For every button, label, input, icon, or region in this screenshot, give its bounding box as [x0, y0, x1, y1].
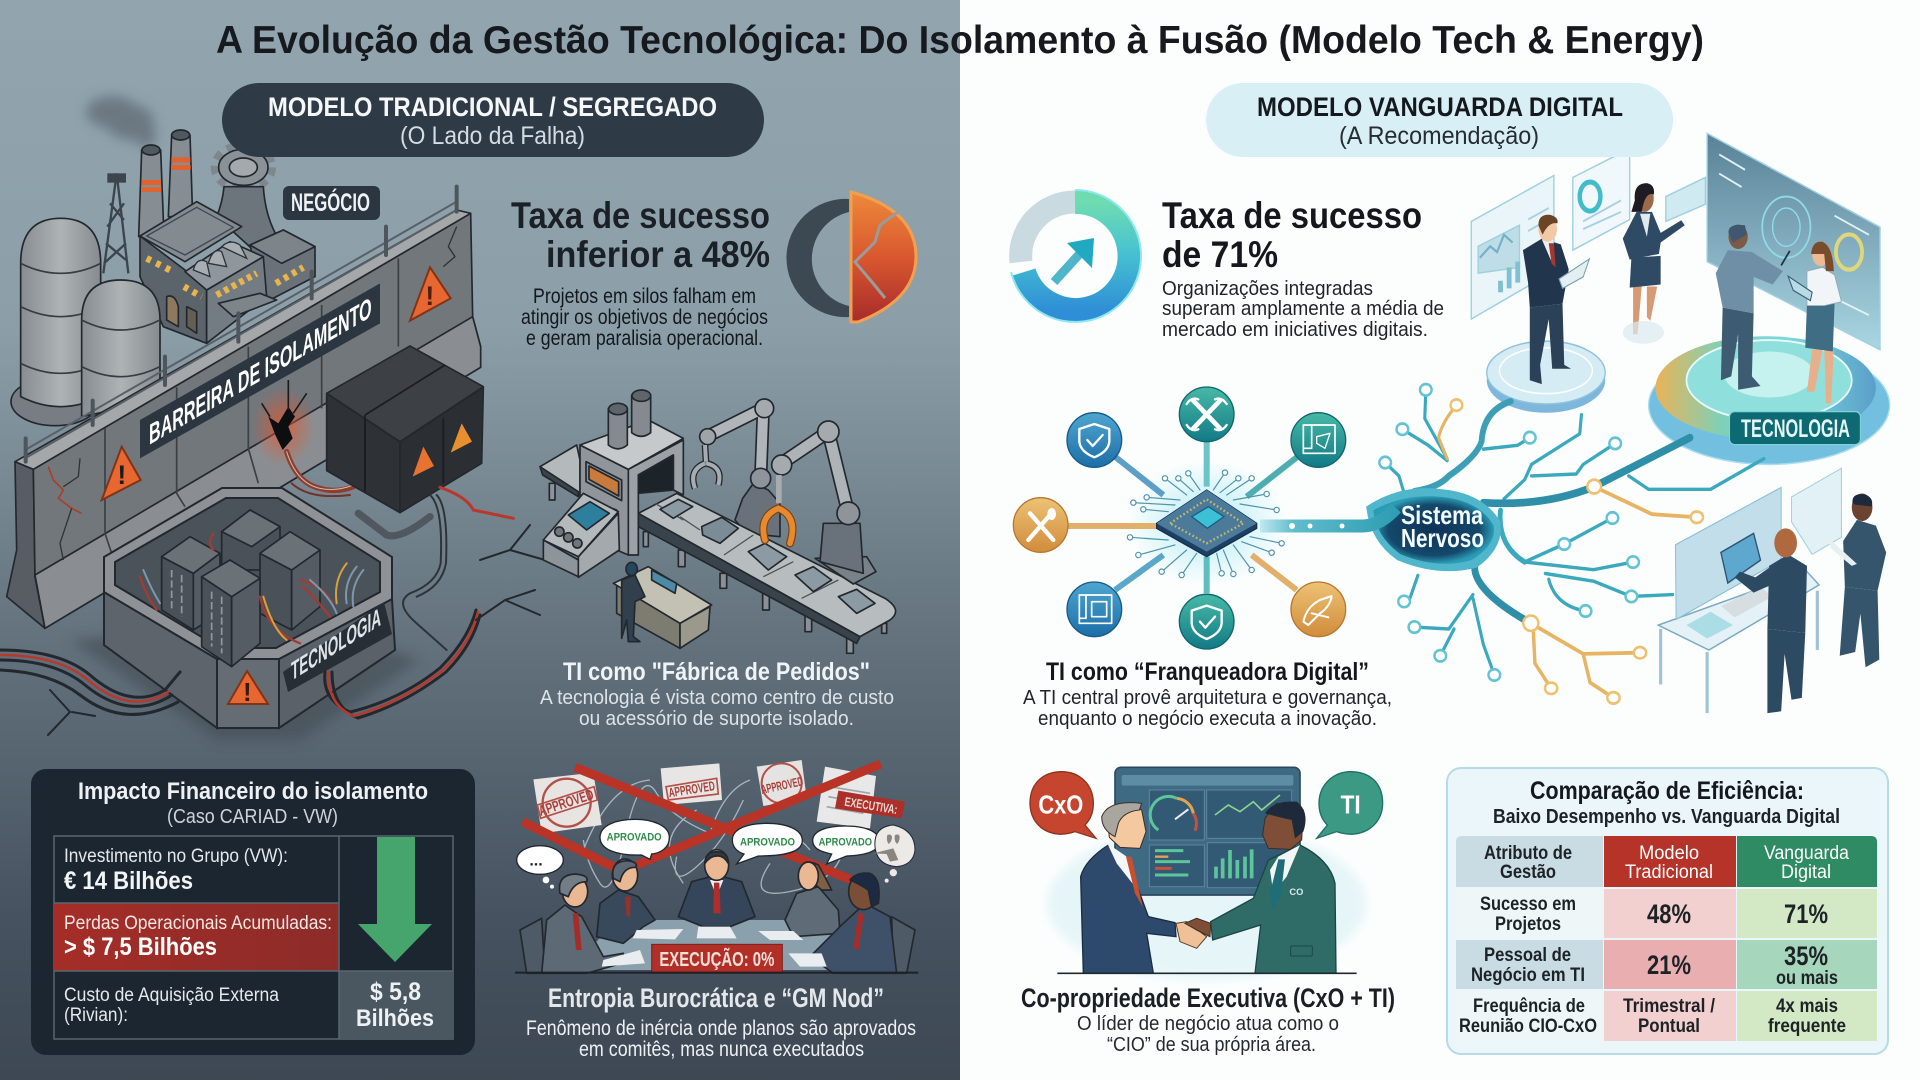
connectors: [1067, 440, 1297, 593]
panel: financial impact: [31, 769, 475, 1055]
caption: bureaucratic entropy: [526, 983, 916, 1061]
financial table: (Rivian):: [64, 1005, 128, 1026]
technology bunker: [70, 488, 420, 740]
bubble: TI: [1317, 772, 1383, 838]
comparison table: Projetos: [1495, 914, 1561, 935]
financial table: $ 5,8: [370, 978, 421, 1006]
speech bubbles: APROVADO: [819, 836, 872, 848]
financial table: Bilhões: [356, 1005, 434, 1032]
caption: digital franchise: [1023, 658, 1392, 730]
control panel: [543, 493, 619, 577]
warning sign: !: [117, 460, 126, 490]
financial table: € 14 Bilhões: [64, 867, 193, 895]
icon: teal blueprint: [1291, 413, 1346, 467]
illustration: central chip franchise hub: [1013, 387, 1346, 649]
icon: microchip: [1157, 490, 1257, 557]
heading: Impacto Financeiro do isolamento: [78, 778, 428, 805]
panel: digital side background: [960, 0, 1920, 1080]
icon: teal wrench: [1179, 387, 1234, 442]
person: woman with tablet: [1788, 242, 1841, 403]
badge: Negócio: NEGÓCIO: [291, 187, 370, 217]
stat: 71% success: Organizações integradas: [1162, 277, 1373, 300]
illustration: order factory conveyor: [540, 390, 896, 653]
caption: order factory: TI como "Fábrica de Pedidos": [563, 658, 870, 686]
caption: digital franchise: A TI central provê arquitetura e governança,: [1023, 686, 1392, 709]
person: man with document: [1828, 494, 1886, 667]
stat: 71% success: Taxa de sucesso: [1162, 195, 1422, 236]
platform: people: [1487, 341, 1605, 413]
illustration: CxO and TI handshake: [1030, 767, 1383, 980]
tangled lines: [583, 780, 844, 893]
comparison table: Frequência de: [1473, 996, 1585, 1017]
comparison table: Reunião CIO-CxO: [1459, 1016, 1597, 1037]
comparison table: Modelo: [1639, 843, 1699, 864]
financial table: Investimento no Grupo (VW):: [64, 846, 288, 867]
warning sign: !: [243, 677, 252, 707]
bubble: TI: TI: [1341, 789, 1361, 819]
floating panels: [1471, 133, 1880, 350]
caption: order factory: ou acessório de suporte isolado.: [579, 707, 854, 730]
badge: Negócio: [283, 186, 380, 220]
comparison table: Gestão: [1500, 862, 1556, 883]
speech bubbles: [517, 819, 915, 889]
handshake: [1176, 918, 1211, 948]
caption: executive co-ownership: O líder de negócio atua como o: [1077, 1012, 1339, 1035]
header: digital vanguard model: MODELO VANGUARDA DIGITAL: [1257, 92, 1623, 122]
approved papers: APPROVED: [667, 778, 716, 800]
desk with workstation: [1658, 468, 1841, 713]
icon: teal shield: [1179, 594, 1234, 649]
comparison table: 4x mais: [1776, 996, 1838, 1017]
stat: 48% success: Projetos em silos falham em: [533, 285, 756, 308]
barrier wall: [7, 187, 481, 628]
stat: 71% success: superam amplamente a média de: [1162, 297, 1444, 320]
icon: blue shield: [1067, 413, 1122, 467]
nerve nodes: [1379, 384, 1703, 704]
comparison table: Vanguarda: [1764, 843, 1849, 864]
icon: smoke: [86, 96, 156, 148]
comparison table: Digital: [1781, 862, 1831, 883]
person: businessman with tablet: [1523, 215, 1589, 384]
panel: financial impact: (Caso CARIAD - VW): [167, 806, 338, 828]
comparison table: Atributo de: [1484, 843, 1572, 864]
approved papers: EXECUTIVA:: [844, 795, 898, 817]
dashboard screen: [1115, 767, 1300, 895]
nerve branches: [1385, 390, 1764, 698]
caption: order factory: [540, 658, 894, 730]
bubble: CxO: CxO: [1038, 789, 1083, 819]
header: digital vanguard model: (A Recomendação): [1339, 122, 1539, 150]
hub label: Sistema Nervoso: Sistema: [1401, 500, 1483, 530]
approved papers: [533, 760, 905, 833]
heading: Comparação de Eficiência:: [1530, 777, 1804, 805]
warning sign: !: [425, 281, 434, 311]
chip to hub connection: [1260, 508, 1396, 529]
label pill: Tecnologia: [1730, 412, 1860, 445]
hub label: Sistema Nervoso: Nervoso: [1401, 523, 1484, 553]
comparison table: Pessoal de: [1484, 945, 1571, 966]
caption: bureaucratic entropy: Entropia Burocrática e “GM Nod”: [548, 983, 884, 1013]
comparison table: Pontual: [1638, 1016, 1700, 1037]
header: digital vanguard model: [1206, 83, 1673, 157]
operator at desk: [613, 562, 712, 648]
label: Tecnologia: TECNOLOGIA: [291, 602, 381, 687]
header: traditional model: [222, 83, 764, 157]
cables from crack: [287, 452, 353, 496]
badge: execution 0%: EXECUÇÃO: 0%: [659, 948, 774, 971]
ground cables and cracks: [0, 525, 545, 735]
speech bubbles: APROVADO: [740, 836, 795, 848]
illustration: nervous system, platforms and digital team: [1366, 133, 1890, 713]
speech bubbles: ...: [529, 852, 543, 869]
header: traditional model: MODELO TRADICIONAL / SEGREGADO: [268, 92, 717, 122]
caption: order factory: A tecnologia é vista como centro de custo: [540, 686, 894, 709]
table papers: [602, 927, 827, 967]
conveyor belt: [638, 493, 896, 653]
back conveyor: [540, 445, 580, 500]
illustration: isolated factory, barrier wall and technology bunker: [0, 96, 545, 740]
comparison table: Trimestral /: [1623, 996, 1716, 1017]
person: businesswoman presenting: [1623, 183, 1685, 344]
financial table: [54, 836, 453, 1039]
robot arm with orange gripper: [763, 421, 876, 584]
comparison table: 48%: [1647, 899, 1691, 929]
crack with glow: [252, 387, 315, 467]
robot arm: [693, 399, 780, 537]
warning sign: [410, 267, 451, 321]
executive TI: [1211, 801, 1336, 973]
banner: Barreira de Isolamento: [140, 283, 380, 458]
stat: 48% success: Taxa de sucesso: [511, 195, 770, 236]
chip traces: [1127, 470, 1284, 578]
label: Tecnologia: TECNOLOGIA: [1741, 415, 1850, 443]
header: traditional model: (O Lado da Falha): [400, 122, 585, 150]
caption: executive co-ownership: Co-propriedade Executiva (CxO + TI): [1021, 983, 1395, 1013]
caption: digital franchise: enquanto o negócio executa a inovação.: [1038, 707, 1377, 730]
hub blob: [1366, 488, 1501, 571]
icon: orange tools: [1013, 498, 1068, 552]
comparison table: 35%: [1784, 941, 1828, 971]
comparison table: [1456, 836, 1877, 1041]
stat: 48% success: [511, 195, 770, 350]
caption: executive co-ownership: [1021, 983, 1395, 1056]
stat: 48% success: inferior a 48%: [546, 234, 770, 275]
icon: blue plan: [1067, 582, 1122, 637]
badge: execution 0%: [652, 944, 782, 973]
panel: efficiency comparison: [1447, 768, 1888, 1054]
arrow: down: [358, 837, 432, 962]
person: man at large screen: [1716, 224, 1790, 390]
stat: 48% success: e geram paralisia operacional.: [526, 327, 763, 350]
comparison table: ou mais: [1776, 968, 1838, 989]
financial table: > $ 7,5 Bilhões: [64, 933, 217, 961]
financial table: Perdas Operacionais Acumuladas:: [64, 913, 332, 934]
icon: arrow: [1054, 238, 1094, 282]
caption: bureaucratic entropy: em comitês, mas nunca executados: [579, 1038, 864, 1061]
executive TI: CO: [1289, 887, 1303, 897]
storage tanks: [11, 218, 160, 426]
title: A Evolução da Gestão Tecnológica: Do Isolamento à Fusão (Modelo Tech & Energy): [216, 19, 1704, 62]
comparison table: 71%: [1784, 899, 1828, 929]
chart: rising donut 71%: [1011, 190, 1141, 322]
bubble: CxO: [1030, 772, 1096, 838]
icon: orange handshake link: [1291, 582, 1346, 637]
approved papers: APPROVED: [760, 774, 804, 797]
caption: executive co-ownership: “CIO” de sua própria área.: [1107, 1033, 1316, 1056]
person: man operating desk: [1735, 528, 1807, 713]
speech bubbles: APROVADO: [607, 832, 662, 844]
caption: digital franchise: TI como “Franqueadora Digital”: [1046, 658, 1369, 686]
illustration: bureaucratic meeting: [515, 760, 918, 973]
financial table: Custo de Aquisição Externa: [64, 985, 279, 1006]
red tape: [523, 764, 881, 881]
meeting table: [570, 920, 868, 970]
platform: technology: [1649, 336, 1890, 464]
chart: broken donut 48%: [786, 192, 916, 322]
label: Tecnologia: [283, 602, 392, 692]
banner: Barreira de Isolamento: BARREIRA DE ISOLAMENTO: [149, 291, 372, 451]
warning sign: [228, 671, 268, 707]
comparison table: frequente: [1768, 1016, 1846, 1037]
black isolation box: [327, 346, 483, 513]
panel: efficiency comparison: Baixo Desempenho vs. Vanguarda Digital: [1493, 806, 1840, 828]
panel: traditional side background: [0, 0, 960, 1080]
executive team: [520, 850, 915, 973]
warning sign: [102, 447, 141, 500]
stat: 48% success: atingir os objetivos de negócios: [521, 306, 768, 329]
hub label: Sistema Nervoso: [1401, 500, 1484, 553]
servers: [162, 510, 320, 667]
executive CxO: [1081, 803, 1176, 973]
pipes and dark cables: [358, 487, 513, 650]
comparison table: Tradicional: [1625, 862, 1713, 883]
comparison table: Sucesso em: [1480, 894, 1576, 915]
approved papers: APPROVED: [537, 787, 596, 820]
stat: 71% success: [1162, 195, 1444, 341]
machine housing: [580, 390, 683, 555]
comparison table: Negócio em TI: [1471, 965, 1585, 986]
comparison table: 21%: [1647, 950, 1691, 980]
stat: 71% success: de 71%: [1162, 234, 1278, 275]
factory: [103, 130, 315, 343]
stat: 71% success: mercado em iniciatives digitais.: [1162, 318, 1428, 341]
caption: bureaucratic entropy: Fenômeno de inércia onde planos são aprovados: [526, 1017, 916, 1040]
